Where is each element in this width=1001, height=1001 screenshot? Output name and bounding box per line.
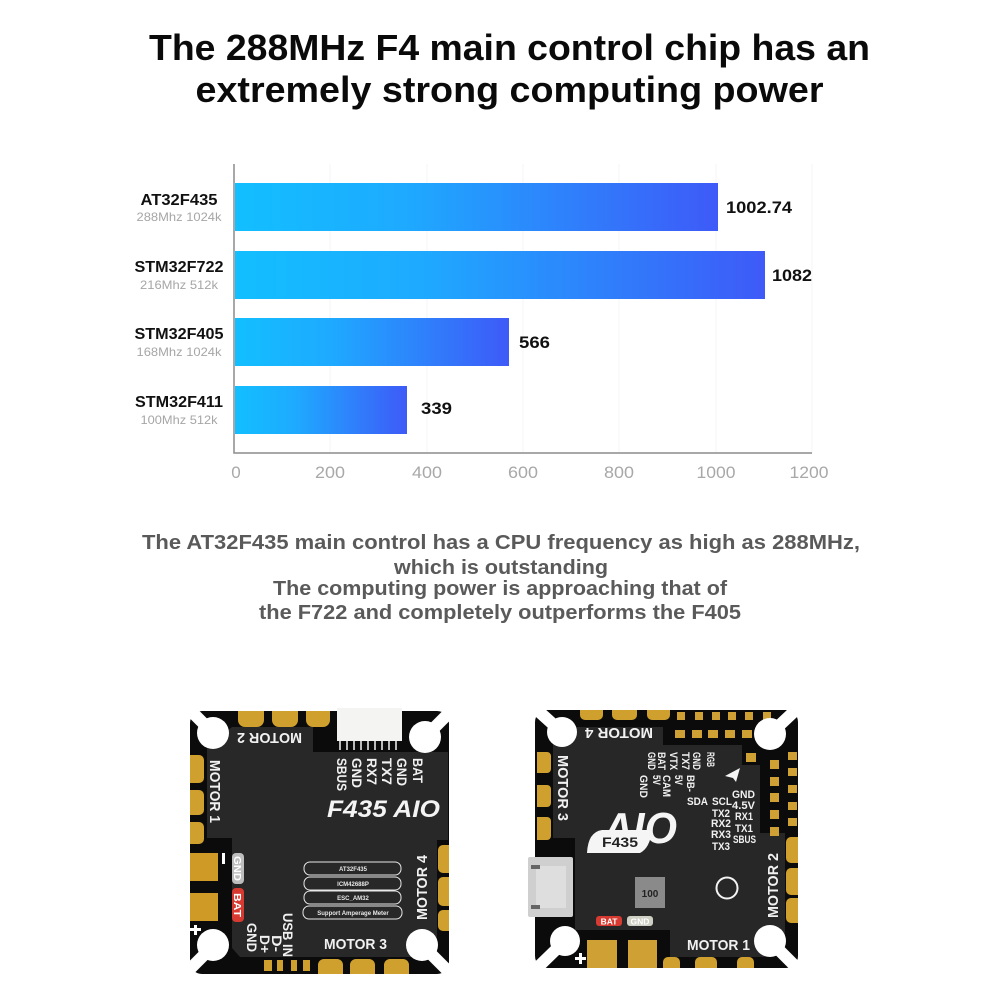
- x axis ticks: [231, 463, 828, 482]
- plus mark: [575, 953, 586, 964]
- capacitor 100: 100: [642, 889, 659, 900]
- silkscreen labels: MOTOR 3: [554, 755, 571, 821]
- silkscreen labels: BAT: [655, 752, 667, 770]
- silkscreen labels: MOTOR 1: [687, 937, 750, 954]
- F435 AIO logo: F435 AIO: [327, 796, 440, 823]
- bottom motor pads: [663, 957, 754, 968]
- x axis ticks: 1200: [790, 463, 828, 482]
- category labels: STM32F411: [135, 394, 223, 411]
- GND badge: [627, 916, 653, 926]
- value labels: 1002.74: [726, 198, 793, 217]
- category labels: AT32F435: [140, 192, 218, 209]
- silkscreen labels: RGB: [704, 752, 716, 767]
- x axis ticks: 0: [231, 463, 241, 482]
- silkscreen labels: GND: [394, 758, 410, 786]
- silkscreen labels: USB IN: [280, 913, 296, 957]
- silkscreen labels: VTX: [667, 752, 679, 771]
- silkscreen labels: TX2: [712, 808, 730, 820]
- silkscreen labels: MOTOR 2: [237, 729, 302, 746]
- value labels: [421, 198, 812, 418]
- silkscreen labels: GND: [690, 752, 702, 770]
- description text: The computing power is approaching that of: [273, 578, 727, 600]
- silkscreen labels: GND: [349, 758, 365, 788]
- power pads: [190, 853, 218, 921]
- silkscreen labels: GND: [637, 775, 649, 798]
- value labels: 339: [421, 399, 452, 418]
- silkscreen labels: RX2: [711, 818, 731, 830]
- category labels: 100Mhz 512k: [140, 413, 219, 427]
- silkscreen labels: GND: [645, 752, 657, 770]
- silkscreen labels: BB-: [684, 775, 696, 792]
- silkscreen labels: GND: [732, 789, 755, 801]
- spec tags: ICM42688P: [337, 882, 369, 888]
- silkscreen labels: D+: [257, 935, 273, 953]
- silkscreen labels: TX7: [379, 758, 395, 785]
- description text: [142, 532, 860, 624]
- silkscreen labels: 5V: [650, 775, 662, 785]
- description text: The AT32F435 main control has a CPU frequency as high as 288MHz,: [142, 532, 860, 554]
- x axis ticks: 800: [604, 463, 634, 482]
- left motor pads: [537, 752, 551, 840]
- category labels: STM32F722: [134, 259, 224, 276]
- silkscreen labels: D-: [269, 935, 285, 952]
- mounting holes: [535, 706, 801, 972]
- description text: the F722 and completely outperforms the F405: [259, 602, 741, 624]
- title: extremely strong computing power: [196, 69, 824, 110]
- silkscreen labels: [206, 729, 431, 957]
- capacitor 100: [635, 877, 665, 908]
- spec tags: [303, 862, 402, 919]
- AIO F435 logo: AIO: [602, 804, 677, 853]
- silkscreen labels: SDA: [687, 796, 708, 808]
- BAT badge: [596, 916, 622, 926]
- bottom motor pads: [318, 959, 409, 974]
- silkscreen labels: 5V: [672, 775, 684, 785]
- boot button ring: [716, 878, 738, 898]
- silkscreen labels: [554, 724, 782, 954]
- inner dark panel: [553, 727, 785, 957]
- bar: AT32F435: [235, 183, 718, 231]
- silkscreen labels: RX7: [364, 758, 380, 785]
- inner dark panel: [207, 727, 448, 957]
- value labels: 566: [519, 333, 550, 352]
- top motor pads: [190, 711, 330, 844]
- arrow marker: [725, 768, 740, 782]
- silkscreen labels: MOTOR 1: [206, 760, 223, 823]
- category labels: 288Mhz 1024k: [136, 210, 223, 224]
- AIO F435 logo: F435: [602, 834, 638, 850]
- BAT badge: BAT: [601, 916, 618, 926]
- BAT badge: BAT: [231, 893, 242, 917]
- silkscreen labels: TX3: [712, 841, 730, 853]
- title: [149, 27, 870, 110]
- bar chart: [134, 164, 828, 482]
- silkscreen labels: SBUS: [334, 758, 350, 791]
- solder pad grid: [675, 712, 797, 836]
- silkscreen labels: CAM: [660, 775, 672, 797]
- silkscreen labels: SCL: [712, 796, 732, 808]
- BAT badge: [231, 888, 244, 922]
- description text: which is outstanding: [393, 557, 608, 579]
- power pads: [587, 940, 657, 968]
- silkscreen labels: 4.5V: [732, 800, 756, 812]
- spec tags: ESC_AM32: [337, 896, 369, 902]
- right motor pads: [438, 845, 449, 931]
- top motor pads: [537, 710, 670, 840]
- bar: STM32F405: [235, 318, 509, 366]
- mounting holes: [186, 710, 452, 974]
- silkscreen labels: TX1: [735, 823, 753, 835]
- silkscreen labels: GND: [244, 923, 260, 952]
- silkscreen labels: MOTOR 3: [324, 936, 387, 953]
- category labels: [134, 192, 224, 427]
- x axis ticks: 1000: [696, 463, 736, 482]
- value labels: 1082: [772, 266, 812, 285]
- spec tags: AT32F435: [339, 867, 368, 873]
- x axis ticks: 600: [508, 463, 538, 482]
- bar: STM32F722: [235, 251, 765, 299]
- silkscreen labels: MOTOR 4: [584, 724, 653, 741]
- polarity marks: [190, 853, 225, 935]
- right motor pads: [786, 837, 798, 923]
- left motor pads: [190, 755, 204, 844]
- bar: STM32F411: [235, 386, 407, 434]
- x axis ticks: 400: [412, 463, 442, 482]
- silkscreen labels: MOTOR 2: [765, 853, 782, 918]
- silkscreen labels: BAT: [410, 758, 426, 783]
- silkscreen labels: MOTOR 4: [414, 854, 431, 920]
- silkscreen labels: SBUS: [733, 834, 756, 846]
- USB connector: [528, 857, 573, 917]
- x axis ticks: 200: [315, 463, 345, 482]
- white connector: [337, 708, 402, 750]
- silkscreen labels: RX3: [711, 829, 731, 841]
- title: The 288MHz F4 main control chip has an: [149, 27, 870, 68]
- category labels: 168Mhz 1024k: [136, 345, 223, 359]
- board: front of flight controller: [186, 708, 452, 974]
- USB solder pads: [264, 960, 310, 971]
- category labels: STM32F405: [134, 326, 224, 343]
- GND badge: GND: [231, 856, 242, 881]
- GND badge: [231, 853, 244, 884]
- silkscreen labels: RX1: [735, 811, 753, 823]
- spec tags: Support Amperage Meter: [317, 911, 389, 917]
- silkscreen labels: TX7: [679, 752, 691, 770]
- board: back of flight controller: [528, 706, 801, 972]
- GND badge: GND: [631, 916, 649, 926]
- category labels: 216Mhz 512k: [140, 278, 219, 292]
